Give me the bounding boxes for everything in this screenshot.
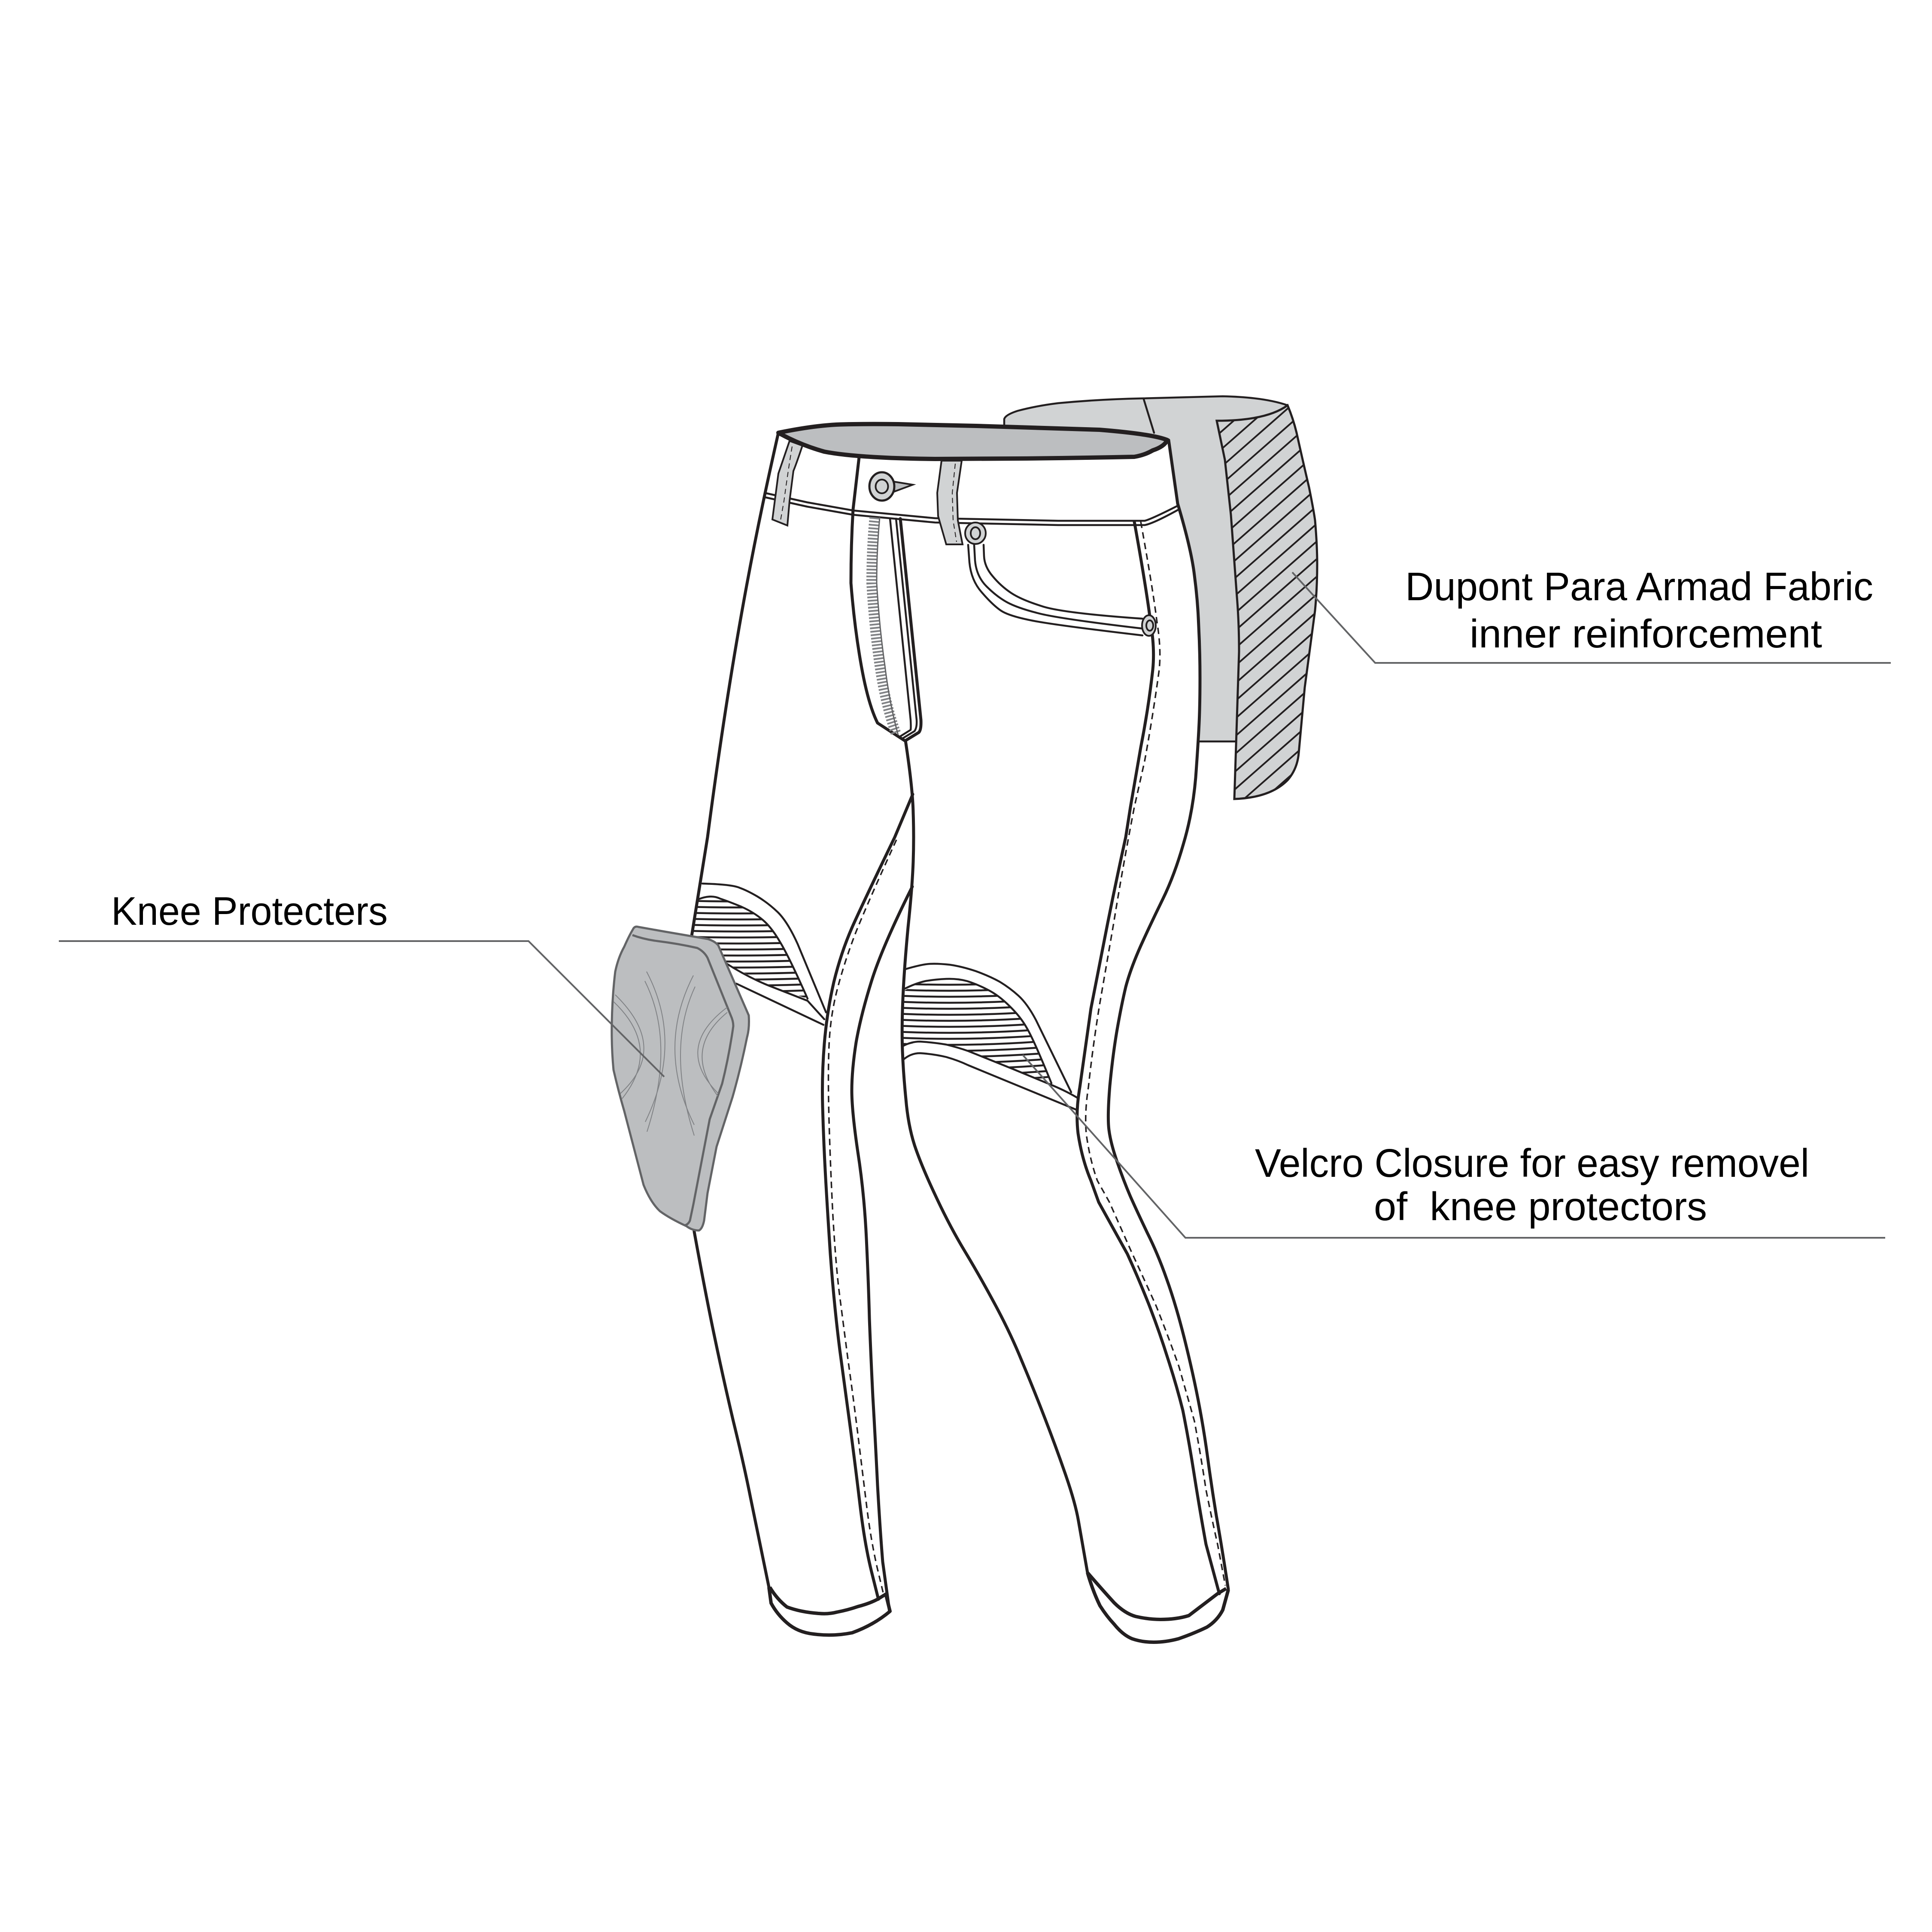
zipper edge <box>877 517 898 735</box>
right leg outer edge <box>1108 440 1228 1589</box>
button tab <box>894 482 913 492</box>
right knee ribbed panel <box>897 964 1078 1110</box>
protector inner contour <box>632 935 733 1225</box>
fly stitch line two <box>896 519 917 738</box>
outer arc <box>702 884 826 1012</box>
fly right edge <box>900 519 921 741</box>
pocket rivet top centre <box>971 527 980 539</box>
pocket inner line <box>984 545 1142 619</box>
lower band bottom <box>902 1053 1078 1110</box>
callout: knee protectors <box>59 889 664 1077</box>
diagonal hatching <box>1220 408 1316 797</box>
inner reinforcement panel <box>1003 395 1318 800</box>
left leg front seam <box>823 794 913 1599</box>
leader line <box>59 941 664 1077</box>
pocket middle line <box>974 545 1142 629</box>
crotch and right leg inner edge <box>902 741 1088 1573</box>
lower band top <box>726 963 824 1019</box>
left hem <box>769 1587 890 1635</box>
label: Knee Protecters <box>111 889 388 933</box>
right leg stitching <box>1086 522 1225 1586</box>
pocket rivet side <box>1142 615 1156 636</box>
protector shell <box>612 927 749 1230</box>
centre belt loop stitching <box>952 464 957 542</box>
fly stitch line one <box>890 519 911 736</box>
label: Dupont Para Armad Fabric <box>1405 564 1873 609</box>
pocket rivet top <box>965 522 986 544</box>
label second line: of knee protectors <box>1374 1184 1707 1229</box>
left leg outer edge <box>687 433 778 1587</box>
leader line <box>1023 1055 1885 1238</box>
trousers outline <box>687 433 1228 1642</box>
label: Velcro Closure for easy removel <box>1255 1141 1809 1185</box>
left knee ribbed panel <box>687 884 826 1025</box>
waist opening <box>778 424 1167 459</box>
callout: velcro closure <box>1023 1055 1885 1238</box>
right hem inner line <box>1088 1573 1226 1619</box>
zipper <box>872 517 896 734</box>
left leg stitching <box>829 840 896 1596</box>
left hem inner line <box>770 1587 887 1614</box>
knee protector <box>612 927 749 1230</box>
left belt loop stitching <box>781 447 792 520</box>
label second line: inner reinforcement <box>1470 611 1822 656</box>
hatched fabric panel <box>1217 405 1317 799</box>
right hem <box>1088 1573 1228 1642</box>
centre belt loop <box>937 461 963 544</box>
ribbing lines <box>694 900 806 998</box>
waist button <box>869 472 894 501</box>
ribbing lines <box>903 983 1048 1078</box>
left belt loop <box>772 441 802 526</box>
lower band top <box>902 1042 1078 1098</box>
grey inner lining <box>1004 396 1288 741</box>
waistband lower stitching <box>765 493 1178 521</box>
pocket rivet side centre <box>1146 620 1153 631</box>
waistband lower stitching second line <box>765 497 1178 525</box>
pocket outer line <box>968 545 1142 635</box>
waist button centre <box>876 480 888 493</box>
leader line <box>1292 572 1891 663</box>
callout: inner reinforcement <box>1292 564 1891 663</box>
waistband and fly <box>765 424 1178 741</box>
lower band bottom <box>736 984 823 1025</box>
right leg front seam <box>1077 522 1219 1594</box>
left leg inner edge <box>852 887 912 1612</box>
inner arc <box>699 896 808 999</box>
protector moulded ridges <box>614 972 727 1136</box>
fly left edge <box>851 457 905 741</box>
lining seam <box>1144 399 1154 433</box>
outer arc <box>906 964 1071 1092</box>
lining outline <box>1004 396 1288 741</box>
inner arc <box>905 979 1051 1083</box>
pocket <box>965 522 1156 636</box>
